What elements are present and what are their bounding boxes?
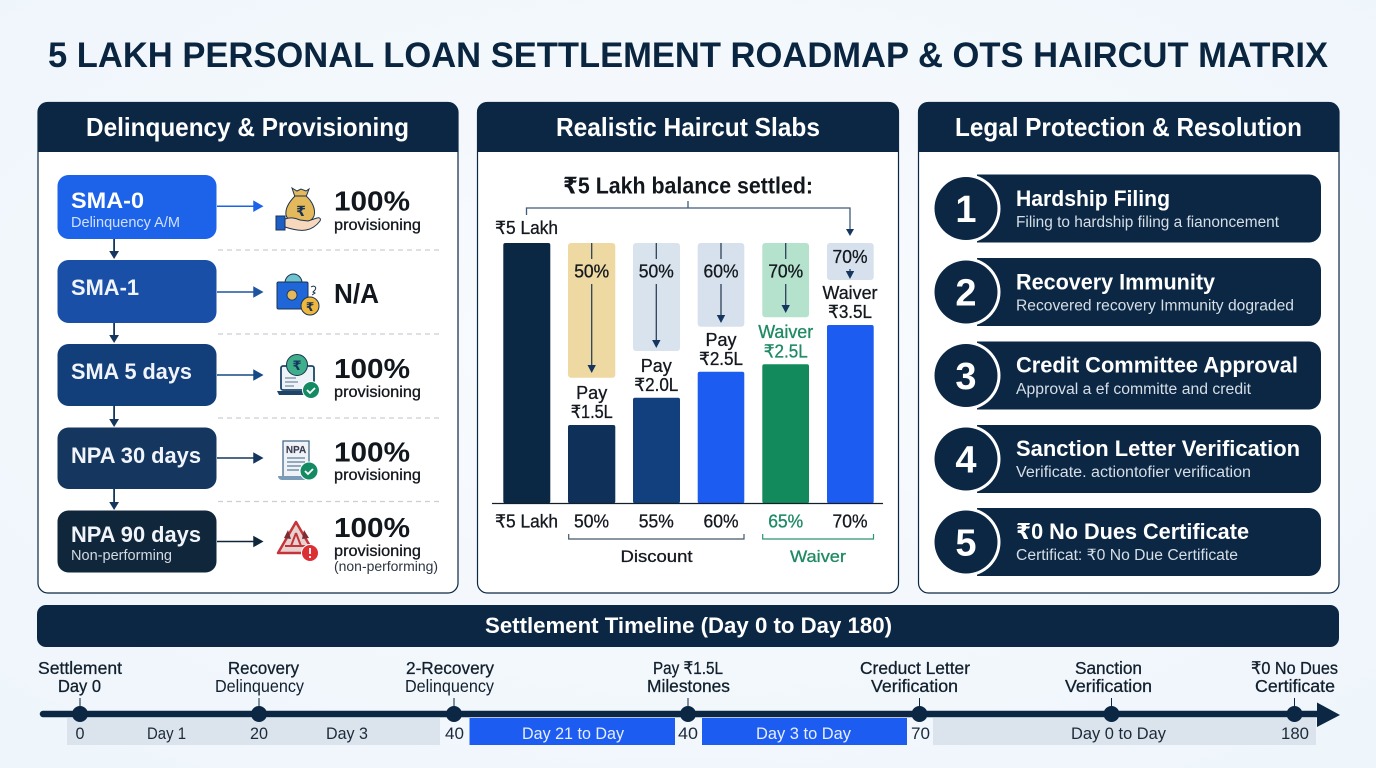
value labels: Pay (576, 383, 607, 403)
band labels: 180 (1281, 724, 1309, 743)
arrows: stage to provisioning (217, 202, 262, 546)
step 2: 2 (955, 272, 977, 314)
milestone labels: Delinquency (215, 676, 304, 696)
step 3: 3 (955, 356, 977, 398)
bar chart: haircut slabs (492, 218, 883, 532)
ghost bars (568, 243, 874, 378)
timeline nodes (72, 698, 1302, 722)
milestone labels: 2-Recovery (406, 658, 494, 678)
step 5: ₹0 No Dues Certificate (1016, 519, 1249, 544)
milestone labels: Verification (1065, 676, 1152, 696)
band labels: 70 (911, 724, 930, 743)
step 1: 1 (955, 189, 977, 231)
timeline header: Settlement Timeline (Day 0 to Day 180) (485, 613, 892, 638)
step 5 (932, 508, 1321, 576)
band labels: Day 3 to Day (756, 724, 851, 743)
text: SMA 5 days provisioning: 100% (334, 353, 410, 384)
panel heading: delinquency (38, 102, 458, 152)
value labels: Waiver (822, 283, 878, 303)
arrows: flow down (109, 239, 119, 510)
milestone labels: Day 0 (58, 676, 101, 696)
milestone labels: Recovery (228, 658, 299, 678)
axis labels: 65% (768, 512, 803, 532)
stage: SMA-0 (58, 175, 216, 239)
value labels: Pay (705, 330, 737, 350)
step 1: Hardship Filing (1016, 186, 1170, 211)
stage: SMA-1: SMA-1 (71, 275, 139, 300)
stage: NPA 30 days (58, 428, 216, 489)
icon: NPA document: NPA (286, 445, 306, 456)
band labels: Day 21 to Day (522, 724, 624, 743)
value labels: 60% (704, 262, 738, 282)
stage: SMA 5 days: SMA 5 days (71, 359, 192, 384)
value labels: ₹5 Lakh (495, 218, 558, 238)
axis labels (495, 512, 868, 532)
band labels (76, 724, 1309, 743)
panel heading: delinquency: Delinquency & Provisioning (86, 112, 409, 142)
panel: delinquency and provisioning (38, 102, 458, 593)
band labels: 40 (678, 724, 698, 743)
axis labels: 55% (639, 512, 674, 532)
text: SMA-0 provisioning: 100% (334, 186, 410, 216)
step 2 (932, 258, 1321, 326)
icon: warning triangle (278, 522, 318, 562)
stage: SMA-0: Delinquency A/M (71, 215, 180, 231)
value labels: ₹2.5L (699, 349, 743, 369)
panel heading: haircut slabs (477, 102, 899, 152)
group bracket: waiver: Waiver (790, 547, 846, 566)
text: SMA-0 provisioning: provisioning (334, 217, 421, 234)
text: NPA 30 days provisioning: 100% (334, 436, 410, 468)
value labels: 70% (832, 247, 868, 267)
stage: NPA 90 days (58, 510, 216, 572)
panel: legal protection and resolution (918, 102, 1339, 593)
chart heading: ₹5 Lakh balance settled: (563, 172, 813, 198)
panel heading: legal protection (918, 102, 1339, 152)
step 3 (932, 341, 1321, 410)
step 2: Recovered recovery Immunity dograded (1016, 298, 1294, 314)
text: SMA 5 days provisioning: provisioning (334, 384, 421, 401)
text: NPA 90 days provisioning: provisioning (334, 543, 421, 560)
stage: SMA-0: SMA-0 (71, 188, 144, 213)
value labels: ₹2.5L (764, 342, 808, 362)
milestone labels: Milestones (647, 676, 730, 696)
step 1 (932, 174, 1321, 243)
milestone labels: Sanction (1075, 658, 1142, 678)
value labels: Waiver (758, 322, 813, 342)
step 4: Sanction Letter Verification (1016, 436, 1300, 461)
axis labels: ₹5 Lakh (495, 512, 558, 532)
value labels: 50% (639, 262, 674, 282)
value labels: ₹1.5L (571, 402, 613, 422)
group bracket: waiver (763, 534, 874, 566)
milestone labels: Settlement (38, 658, 122, 678)
group bracket: discount (569, 534, 744, 566)
axis labels: 60% (704, 512, 738, 532)
text: NPA 90 days provisioning: 100% (334, 512, 410, 543)
axis labels: 70% (832, 512, 868, 532)
band labels: 0 (76, 724, 84, 743)
value labels: 50% (574, 262, 609, 282)
value labels (495, 218, 878, 422)
title: 5 LAKH PERSONAL LOAN SETTLEMENT ROADMAP & OTS HAIRCUT MATRIX (48, 36, 1329, 75)
icon: laptop document with rupee (277, 354, 320, 398)
icon: money bag in hand (276, 188, 320, 230)
milestone labels (38, 658, 1338, 696)
step 2: Recovery Immunity (1016, 270, 1216, 294)
panel: realistic haircut slabs (477, 102, 899, 593)
step 4: Verificate. actiontofier verification (1016, 464, 1251, 481)
group bracket: discount: Discount (620, 547, 693, 566)
text: NPA 90 days provisioning: (non-performing) (334, 558, 438, 574)
timeline arrow (43, 702, 1340, 727)
milestone labels: Verification (871, 676, 958, 696)
step 5: Certificat: ₹0 No Due Certificate (1016, 547, 1238, 564)
panel heading: haircut slabs: Realistic Haircut Slabs (556, 112, 820, 142)
value labels: 70% (768, 262, 803, 282)
timeline bands (67, 718, 1316, 745)
band labels: 40 (445, 724, 464, 743)
text: SMA-1 N/A: N/A (334, 278, 379, 309)
bracket arrow (526, 201, 854, 236)
axis labels: 50% (574, 512, 609, 532)
value labels: Pay (641, 356, 672, 376)
icon: money bag in hand: ₹ (296, 203, 306, 219)
value labels: ₹3.5L (828, 302, 872, 322)
step 5: 5 (955, 522, 977, 564)
stage: NPA 90 days: NPA 90 days (71, 522, 201, 547)
step 1: Filing to hardship filing a fianoncement (1016, 214, 1280, 231)
value labels: ₹2.0L (634, 375, 678, 395)
timeline (38, 658, 1340, 745)
band labels: Day 1 (147, 724, 186, 743)
milestone labels: Pay ₹1.5L (653, 658, 723, 678)
arrows in bars (588, 243, 854, 373)
icon: shopping bag with coin (277, 274, 319, 315)
milestone labels: ₹0 No Dues (1251, 658, 1338, 678)
step 4 (932, 424, 1321, 494)
icon: NPA document (278, 441, 318, 480)
stage: NPA 30 days: NPA 30 days (71, 443, 201, 468)
stage: NPA 90 days: Non-performing (71, 548, 172, 564)
text: NPA 30 days provisioning (334, 436, 421, 484)
stage: SMA-1 (58, 260, 216, 323)
band labels: Day 3 (326, 724, 368, 743)
text: NPA 90 days provisioning (334, 512, 438, 574)
panel heading: legal protection: Legal Protection & Resolution (955, 112, 1302, 142)
stage: SMA 5 days (58, 344, 216, 406)
timeline header (37, 605, 1339, 647)
icon: laptop document with rupee: ₹ (292, 358, 302, 373)
stage flow (58, 175, 216, 572)
milestone labels: Delinquency (405, 676, 494, 696)
text: SMA 5 days provisioning (334, 353, 421, 401)
text: NPA 30 days provisioning: provisioning (334, 467, 421, 484)
icon: shopping bag with coin: ₹ (306, 300, 314, 314)
solid bars (503, 243, 874, 503)
step 4: 4 (955, 440, 977, 482)
milestone labels: Certificate (1255, 676, 1335, 696)
step 3: Credit Committee Approval (1016, 352, 1298, 378)
milestone labels: Creduct Letter (860, 658, 970, 678)
band labels: 20 (250, 724, 268, 743)
step 3: Approval a ef committe and credit (1016, 381, 1252, 398)
band labels: Day 0 to Day (1071, 724, 1166, 743)
text: SMA-0 provisioning (334, 186, 421, 234)
